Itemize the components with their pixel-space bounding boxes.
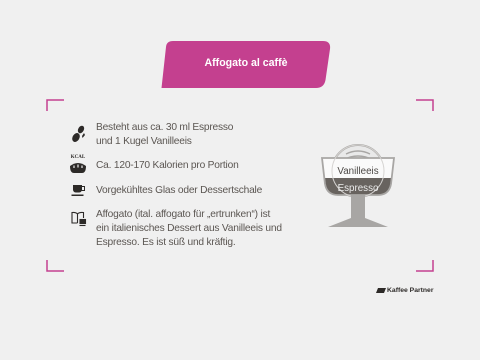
icon: kcal scale: KCAL — [71, 155, 85, 160]
text: calories: Ca. 120-170 Kalorien pro Portion — [96, 160, 239, 170]
text: ingredients: Besteht aus ca. 30 ml Espresso — [96, 122, 233, 132]
text: ingredients: und 1 Kugel Vanilleeis — [96, 136, 192, 146]
text: ingredients — [96, 122, 233, 146]
title banner — [162, 41, 330, 88]
label: Vanilleeis: Vanilleeis — [337, 166, 379, 177]
text: serving: Vorgekühltes Glas oder Dessertschale — [96, 185, 262, 196]
label: Espresso: Espresso — [338, 183, 378, 194]
glass bowl — [322, 145, 394, 197]
title banner: Affogato al caffè — [204, 56, 288, 68]
text: description: Espresso. Es ist süß und kräftig. — [96, 237, 235, 248]
icon: coffee beans — [72, 126, 85, 142]
diagram: affogato glass — [321, 144, 395, 227]
logo: Kaffee Partner: Kaffee Partner — [387, 287, 433, 294]
icon: kcal scale — [70, 154, 86, 173]
icon: book with cup — [71, 212, 86, 226]
icon: coffee cup — [72, 185, 85, 196]
text: description: Affogato (ital. affogato für „ertrunken“) ist — [96, 209, 270, 220]
text: description — [96, 209, 282, 248]
text: description: ein italienisches Dessert aus Vanilleeis und — [96, 223, 282, 234]
glass stem and foot — [328, 195, 388, 227]
frame corner marks — [46, 99, 434, 272]
ice cream scoop — [332, 145, 384, 197]
